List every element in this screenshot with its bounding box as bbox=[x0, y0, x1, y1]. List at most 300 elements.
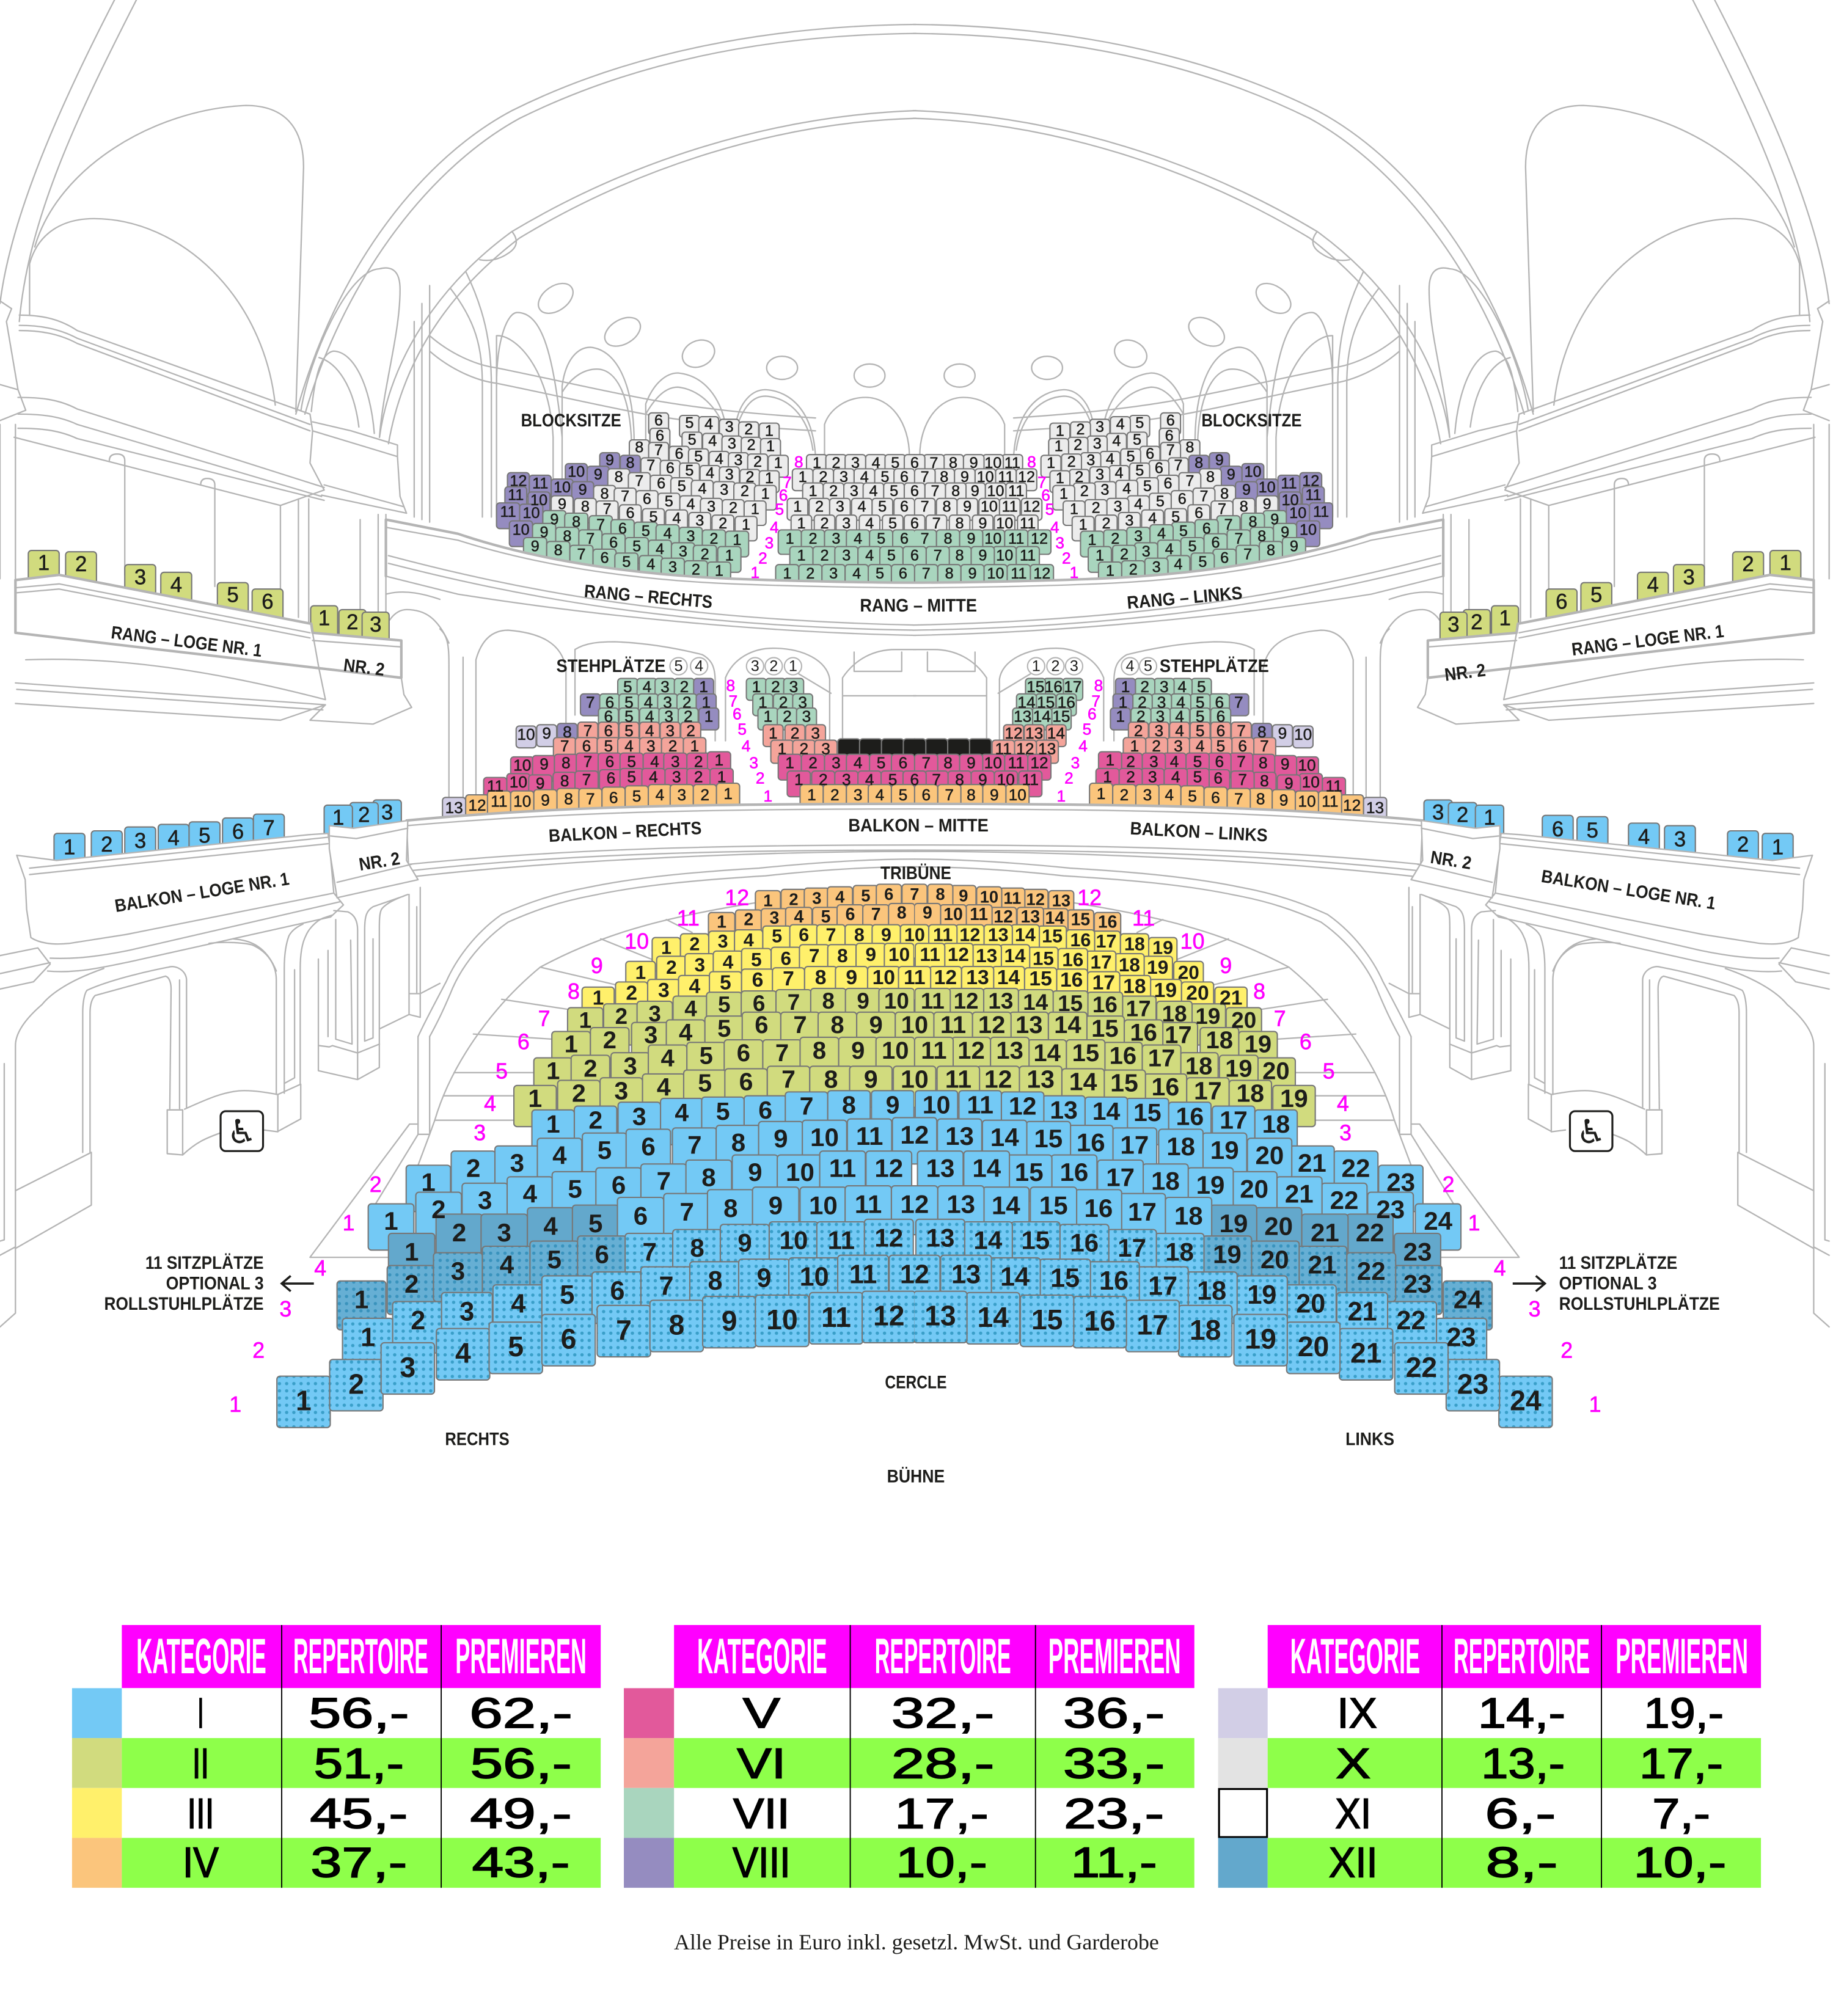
price values: 49,- bbox=[470, 1789, 572, 1837]
parkett row 10 numbers: 6 bbox=[799, 925, 809, 946]
seat numbers: Logen: 1 bbox=[332, 806, 344, 830]
parkett row 6 numbers: 14 bbox=[1054, 1012, 1081, 1039]
cercle row 2 numbers: 12 bbox=[900, 1260, 929, 1289]
rang middle numbers: 9 bbox=[970, 455, 978, 472]
rang middle numbers: 1 bbox=[799, 469, 807, 486]
seat numbers: Logen: 2 bbox=[75, 553, 87, 576]
seat numbers: Logen: 3 bbox=[1432, 802, 1444, 825]
row labels parkett and cercle left: 1 bbox=[229, 1392, 241, 1417]
balkon middle numbers: 3 bbox=[842, 770, 851, 789]
parkett row 12 numbers: 13 bbox=[1052, 891, 1070, 910]
parkett row 8 numbers: 19 bbox=[1154, 979, 1177, 1002]
rang left numbers: 1 bbox=[765, 422, 774, 439]
balkon left numbers: 6 bbox=[606, 752, 614, 770]
balkon left numbers: 4 bbox=[645, 707, 654, 726]
parkett row 7 numbers: 14 bbox=[1023, 990, 1048, 1015]
balkon left numbers: 3 bbox=[663, 693, 672, 711]
balkon middle numbers: 8 bbox=[967, 786, 976, 804]
wheelchair note left: OPTIONAL 3 bbox=[166, 1274, 264, 1294]
parkett row 6 numbers: 7 bbox=[793, 1012, 807, 1039]
rang left numbers: 8 bbox=[600, 485, 609, 502]
wheelchair note left: ROLLSTUHLPLÄTZE bbox=[104, 1294, 264, 1314]
cercle row 4 numbers: 20 bbox=[1264, 1211, 1293, 1240]
parkett row 11 numbers: 4 bbox=[794, 907, 803, 927]
parkett row 6 numbers: 18 bbox=[1206, 1027, 1233, 1054]
balkon right numbers: 1 bbox=[1130, 737, 1139, 755]
cercle row 4 numbers: 9 bbox=[769, 1191, 783, 1219]
parkett row 3 numbers: 18 bbox=[1262, 1110, 1290, 1138]
parkett row 3 numbers: 9 bbox=[886, 1090, 899, 1119]
balkon middle numbers: 12 bbox=[1016, 739, 1034, 758]
balkon left numbers: 1 bbox=[699, 677, 708, 696]
Rang seats, right half bbox=[903, 413, 1333, 589]
balkon right numbers: 3 bbox=[1155, 721, 1163, 740]
balkon middle numbers: 13 bbox=[1025, 724, 1043, 742]
balkon left numbers: 2 bbox=[686, 721, 695, 740]
rang middle numbers: 10 bbox=[987, 483, 1004, 500]
balkon left numbers: 2 bbox=[684, 707, 693, 726]
row 5 bbox=[534, 1037, 915, 1099]
balkon right numbers: 1 bbox=[1121, 677, 1130, 696]
cercle row 4 numbers: 11 bbox=[855, 1189, 882, 1218]
rang right numbers: 7 bbox=[1224, 516, 1233, 533]
balkon left numbers: 2 bbox=[682, 693, 692, 711]
balkon left numbers: 6 bbox=[606, 693, 614, 711]
rang mitte rows 8 to 4 bbox=[787, 455, 925, 537]
balkon right numbers: 9 bbox=[1284, 774, 1293, 792]
balkon left numbers: 4 bbox=[650, 752, 659, 770]
parkett row 4 numbers: 9 bbox=[864, 1065, 878, 1093]
rang mitte rows 3 to 1 bbox=[775, 530, 926, 589]
rang middle numbers: 4 bbox=[852, 565, 861, 582]
cercle row 4 numbers: 7 bbox=[679, 1197, 694, 1226]
rang middle numbers: 4 bbox=[869, 483, 877, 500]
cercle row 2 numbers: 5 bbox=[560, 1280, 574, 1310]
parkett row 3 numbers: 8 bbox=[842, 1090, 856, 1119]
row labels parkett and cercle left: 8 bbox=[568, 979, 580, 1004]
balkon right numbers: 2 bbox=[1138, 693, 1147, 711]
row labels rang and balkon: 8 bbox=[1027, 453, 1036, 471]
cercle row 3 numbers: 11 bbox=[828, 1225, 855, 1254]
balkon middle numbers: 6 bbox=[921, 786, 931, 804]
cercle row 1 numbers: 17 bbox=[1137, 1309, 1168, 1340]
cercle row 3 numbers: 24 bbox=[1454, 1285, 1482, 1313]
rang right numbers: 2 bbox=[1076, 421, 1085, 438]
rang left numbers: 1 bbox=[715, 563, 723, 580]
rang middle numbers: 7 bbox=[921, 498, 929, 515]
price values: 10,- bbox=[896, 1838, 987, 1886]
swatches bbox=[72, 1688, 122, 1888]
balkon right numbers: 8 bbox=[1256, 789, 1265, 808]
price values: IX bbox=[1337, 1689, 1377, 1737]
parkett row 10 numbers: 9 bbox=[881, 925, 891, 946]
price values: 36,- bbox=[1063, 1689, 1165, 1737]
parkett row 10 numbers: 18 bbox=[1124, 933, 1145, 954]
rang right numbers: 3 bbox=[1096, 418, 1104, 436]
parkett row 5 numbers: 18 bbox=[1185, 1053, 1212, 1079]
rang left numbers: 12 bbox=[510, 472, 527, 489]
circled digits: 5 bbox=[675, 658, 683, 675]
balkon middle numbers: 1 bbox=[778, 739, 786, 758]
parkett row 10 numbers: 8 bbox=[854, 925, 865, 946]
circled digits: 4 bbox=[695, 658, 703, 675]
parkett row 2 numbers: 21 bbox=[1298, 1149, 1326, 1177]
rang middle numbers: 4 bbox=[865, 547, 874, 564]
price values: I bbox=[197, 1689, 204, 1737]
rang right numbers: 2 bbox=[1075, 469, 1083, 486]
parkett row 1 numbers: 7 bbox=[657, 1166, 671, 1195]
cercle row 4 numbers: 18 bbox=[1174, 1201, 1203, 1230]
balkon middle numbers: 5 bbox=[899, 786, 907, 804]
parkett row 1 numbers: 6 bbox=[612, 1170, 626, 1199]
cercle row 4 numbers: 17 bbox=[1128, 1197, 1157, 1226]
balkon right numbers: 4 bbox=[1170, 752, 1179, 770]
rang right numbers: 6 bbox=[1166, 412, 1175, 429]
balkon right numbers: 12 bbox=[1343, 796, 1361, 814]
cercle row 1 numbers: 21 bbox=[1350, 1337, 1382, 1369]
cercle row 2 numbers: 11 bbox=[849, 1260, 877, 1289]
cercle row 3 numbers: 17 bbox=[1118, 1233, 1146, 1262]
rang middle numbers: 3 bbox=[842, 515, 851, 532]
seat numbers: Logen: 4 bbox=[168, 827, 180, 850]
parkett row 6 numbers: 16 bbox=[1130, 1020, 1157, 1046]
parkett row 12 numbers: 4 bbox=[835, 887, 845, 906]
rang left numbers: 4 bbox=[698, 480, 706, 497]
cercle row 3 numbers: 16 bbox=[1070, 1228, 1099, 1257]
parkett row 1 numbers: 22 bbox=[1330, 1186, 1358, 1214]
rang left numbers: 4 bbox=[664, 525, 672, 542]
rang right numbers: 3 bbox=[1113, 498, 1122, 515]
rang middle numbers: 7 bbox=[932, 515, 941, 532]
balkon right numbers: 11 bbox=[1322, 792, 1338, 811]
parkett row 6 numbers: 3 bbox=[644, 1022, 657, 1049]
row labels parkett and cercle right: 3 bbox=[1529, 1297, 1541, 1321]
cercle row 3 numbers: 5 bbox=[547, 1245, 562, 1274]
rang left numbers: 1 bbox=[725, 547, 734, 564]
balkon left numbers: 3 bbox=[677, 786, 686, 804]
price values: X bbox=[1336, 1739, 1370, 1787]
rang right numbers: 10 bbox=[1282, 492, 1299, 509]
parkett row 11 numbers: 10 bbox=[943, 905, 963, 924]
balkon left numbers: 6 bbox=[604, 707, 613, 726]
seat numbers: Logen: 4 bbox=[1638, 826, 1650, 849]
rang right numbers: 7 bbox=[1166, 442, 1175, 459]
balkon middle numbers: 12 bbox=[1030, 753, 1048, 772]
cercle row 3 numbers: 8 bbox=[690, 1233, 704, 1262]
parkett row 8 numbers: 5 bbox=[720, 971, 731, 994]
circled digits: 3 bbox=[751, 658, 759, 675]
Rang seats, left half bbox=[497, 413, 926, 589]
rang right numbers: 4 bbox=[1112, 433, 1121, 450]
pink rows bbox=[484, 752, 926, 803]
stehplaetze and row 4 to 5 seats bbox=[516, 679, 825, 748]
theatre architecture line drawing, left half bbox=[0, 0, 916, 1327]
balkon right numbers: 5 bbox=[1196, 693, 1205, 711]
balkon left numbers: 10 bbox=[510, 773, 527, 791]
cercle row 1 numbers: 11 bbox=[821, 1301, 851, 1333]
rang middle numbers: 4 bbox=[858, 498, 866, 515]
rang middle numbers: 3 bbox=[840, 469, 848, 486]
header labels: REPERTOIRE bbox=[1454, 1629, 1590, 1684]
cercle row 4 numbers: 22 bbox=[1356, 1218, 1385, 1246]
rang middle numbers: 11 bbox=[1008, 530, 1024, 547]
parkett row 4 numbers: 11 bbox=[945, 1065, 971, 1093]
balkon middle numbers: 7 bbox=[932, 770, 941, 789]
balkon middle numbers: 17 bbox=[1064, 677, 1081, 696]
rang left numbers: 6 bbox=[609, 534, 618, 551]
wheelchair note right: OPTIONAL 3 bbox=[1559, 1274, 1657, 1294]
balkon middle numbers: 4 bbox=[876, 786, 884, 804]
parkett row 5 numbers: 16 bbox=[1110, 1042, 1136, 1069]
balkon middle numbers: 11 bbox=[995, 739, 1012, 758]
cercle row 3 numbers: 19 bbox=[1213, 1240, 1242, 1268]
footer note: Alle Preise in Euro inkl. gesetzl. MwSt. und Garderobe bbox=[674, 1930, 1159, 1954]
rang middle numbers: 1 bbox=[786, 530, 794, 547]
balkon right numbers: 2 bbox=[1136, 707, 1146, 726]
row labels parkett and cercle right: 4 bbox=[1337, 1091, 1349, 1116]
rang middle numbers: 2 bbox=[820, 547, 829, 564]
row labels parkett and cercle left: 9 bbox=[591, 954, 603, 978]
cercle row 2 numbers: 21 bbox=[1347, 1297, 1377, 1326]
balkon right numbers: 7 bbox=[1237, 721, 1246, 740]
cercle row 2 numbers: 9 bbox=[757, 1264, 772, 1293]
rang left numbers: 5 bbox=[649, 508, 657, 525]
rang right numbers: 6 bbox=[1164, 475, 1173, 492]
rang right numbers: 1 bbox=[1088, 531, 1096, 549]
parkett row 2 numbers: 5 bbox=[598, 1136, 612, 1164]
cercle row 1 numbers: 24 bbox=[1510, 1385, 1542, 1417]
balkon middle numbers: 2 bbox=[791, 724, 799, 742]
row labels rang and balkon: 2 bbox=[1062, 549, 1071, 568]
rang links: RANG – LINKS bbox=[1126, 583, 1243, 613]
row labels rang and balkon: 6 bbox=[779, 486, 788, 505]
rang right numbers: 1 bbox=[1047, 455, 1055, 472]
rang left numbers: 9 bbox=[579, 481, 587, 499]
parkett row 3 numbers: 7 bbox=[800, 1092, 813, 1120]
parkett row 9 numbers: 15 bbox=[1033, 947, 1054, 969]
balkon middle numbers: 14 bbox=[1047, 724, 1065, 742]
balkon right numbers: 4 bbox=[1196, 737, 1205, 755]
balkon middle numbers: 3 bbox=[832, 753, 841, 772]
balkon right numbers: 4 bbox=[1175, 721, 1184, 740]
parkett row 8 numbers: 15 bbox=[1029, 968, 1052, 990]
rang middle numbers: 2 bbox=[809, 530, 818, 547]
row labels rang and balkon: 7 bbox=[1091, 692, 1100, 710]
parkett row 2 numbers: 8 bbox=[731, 1128, 745, 1156]
parkett row 9 numbers: 19 bbox=[1147, 956, 1168, 978]
cercle row 4 numbers: 10 bbox=[809, 1191, 838, 1219]
cercle row 1 numbers: 4 bbox=[455, 1337, 471, 1369]
column dividers bbox=[282, 1625, 441, 1888]
price values: 28,- bbox=[891, 1739, 994, 1787]
seat numbers: Logen: 4 bbox=[1647, 574, 1659, 597]
parkett row 12 numbers: 2 bbox=[789, 889, 799, 908]
row 4 bbox=[514, 1066, 936, 1127]
parkett row 6 numbers: 6 bbox=[755, 1012, 768, 1039]
rang left numbers: 1 bbox=[751, 501, 759, 518]
balkon right numbers: 2 bbox=[1134, 721, 1143, 740]
rang left numbers: 9 bbox=[558, 495, 566, 513]
rang left numbers: 10 bbox=[568, 464, 585, 481]
cercle row 3 numbers: 2 bbox=[404, 1269, 419, 1298]
balkon right numbers: 4 bbox=[1175, 707, 1184, 726]
parkett row 8 numbers: 12 bbox=[934, 966, 957, 988]
cercle row 4 numbers: 5 bbox=[588, 1209, 602, 1238]
cercle row 1 numbers: 8 bbox=[668, 1309, 684, 1340]
parkett row 10 numbers: 12 bbox=[959, 925, 980, 946]
parkett row 12 numbers: 6 bbox=[884, 885, 893, 904]
circled digits: 4 bbox=[1125, 658, 1134, 675]
balkon middle numbers: 14 bbox=[1033, 707, 1051, 726]
rang middle numbers: 11 bbox=[1020, 515, 1036, 532]
rang middle numbers: 5 bbox=[891, 455, 899, 472]
rang left numbers: 10 bbox=[554, 479, 571, 496]
balkon middle numbers: 2 bbox=[830, 786, 840, 804]
parkett row 6 numbers: 8 bbox=[830, 1012, 844, 1039]
cercle row 2 numbers: 22 bbox=[1396, 1306, 1425, 1335]
rang left numbers: 6 bbox=[618, 520, 627, 537]
balcony rails, left half bbox=[15, 520, 916, 971]
balkon left numbers: 4 bbox=[643, 677, 651, 696]
balkon left numbers: 11 bbox=[487, 776, 503, 795]
circled digits: 3 bbox=[1070, 658, 1078, 675]
rang middle numbers: 10 bbox=[984, 530, 1001, 547]
rang middle numbers: 6 bbox=[899, 565, 907, 582]
row labels parkett and cercle left: 1 bbox=[343, 1211, 354, 1235]
parkett row 6 numbers: 13 bbox=[1015, 1012, 1042, 1039]
balkon left numbers: 8 bbox=[564, 789, 573, 808]
cercle row 1 numbers: 10 bbox=[766, 1304, 798, 1335]
balkon right numbers: 6 bbox=[1217, 707, 1225, 726]
parkett row 11 numbers: 13 bbox=[1021, 907, 1040, 927]
cercle row 1 numbers: 9 bbox=[722, 1305, 737, 1337]
parkett row 9 numbers: 10 bbox=[888, 943, 910, 965]
row labels parkett and cercle right: 7 bbox=[1274, 1006, 1286, 1031]
parkett row 2 numbers: 13 bbox=[945, 1121, 974, 1150]
balkon right numbers: 13 bbox=[1366, 798, 1384, 817]
rang middle numbers: 11 bbox=[1008, 483, 1024, 500]
rang right numbers: 4 bbox=[1116, 416, 1125, 433]
parkett row 9 numbers: 11 bbox=[920, 943, 940, 965]
balkon middle numbers: 3 bbox=[854, 786, 863, 804]
parkett row 7 numbers: 8 bbox=[822, 988, 835, 1013]
row 11 bbox=[708, 904, 915, 941]
price values: 8,- bbox=[1486, 1838, 1557, 1886]
seat numbers: Logen: 1 bbox=[64, 836, 75, 859]
parkett row 10 numbers: 14 bbox=[1015, 925, 1036, 946]
balkon left numbers: 5 bbox=[624, 721, 634, 740]
balkon middle numbers: 11 bbox=[1008, 753, 1025, 772]
parkett row 8 numbers: 4 bbox=[689, 975, 700, 998]
rang left numbers: 5 bbox=[642, 522, 650, 539]
row labels parkett and cercle right: 9 bbox=[1220, 954, 1232, 978]
rang middle numbers: 4 bbox=[854, 530, 862, 547]
balkon right numbers: 5 bbox=[1217, 737, 1225, 755]
balkon left numbers: 1 bbox=[690, 737, 699, 755]
price values: VI bbox=[737, 1739, 786, 1787]
rang right numbers: 3 bbox=[1134, 528, 1143, 545]
rang left numbers: 8 bbox=[635, 439, 643, 456]
cercle row 2 numbers: 20 bbox=[1296, 1290, 1325, 1319]
price values: XII bbox=[1329, 1838, 1378, 1886]
balkon middle numbers: 1 bbox=[807, 786, 816, 804]
rang left numbers: 2 bbox=[741, 483, 749, 500]
rang middle numbers: 8 bbox=[949, 455, 957, 472]
balkon middle numbers: 14 bbox=[1017, 693, 1036, 711]
cercle row 1 numbers: 20 bbox=[1298, 1331, 1329, 1362]
balkon left numbers: 3 bbox=[672, 768, 681, 786]
parkett row 11 numbers: 8 bbox=[897, 904, 907, 923]
rang right numbers: 2 bbox=[1092, 500, 1100, 517]
parkett row 9 numbers: 5 bbox=[751, 949, 762, 971]
Parkett and Cercle seats, left half bbox=[277, 884, 940, 1428]
rang right numbers: 10 bbox=[1259, 479, 1276, 496]
parkett row 10 numbers: 1 bbox=[661, 938, 671, 959]
row labels rang and balkon: 2 bbox=[1064, 769, 1074, 787]
seat numbers: Logen: 2 bbox=[101, 833, 112, 856]
parkett row 4 numbers: 15 bbox=[1110, 1069, 1138, 1097]
parkett row 2 numbers: 9 bbox=[774, 1124, 788, 1153]
parkett row 9 numbers: 12 bbox=[948, 943, 969, 965]
parkett row 4 numbers: 1 bbox=[528, 1084, 542, 1112]
balkon right numbers: 4 bbox=[1171, 768, 1180, 786]
parkett row 8 numbers: 10 bbox=[873, 966, 895, 988]
rang right numbers: 7 bbox=[1174, 457, 1182, 474]
balkon left numbers: 3 bbox=[664, 707, 673, 726]
balkon left numbers: 2 bbox=[668, 737, 677, 755]
rang middle numbers: 9 bbox=[963, 498, 971, 515]
balkon middle numbers: 13 bbox=[1014, 707, 1031, 726]
rang right numbers: 8 bbox=[1185, 439, 1194, 456]
seat numbers: Logen: 1 bbox=[38, 552, 49, 575]
rang left numbers: 5 bbox=[665, 493, 673, 510]
rang middle numbers: 2 bbox=[832, 455, 840, 472]
seat numbers: Logen: 1 bbox=[318, 607, 330, 630]
parkett row 10 numbers: 19 bbox=[1152, 938, 1173, 959]
balkon right numbers: 3 bbox=[1148, 768, 1157, 786]
cercle row 3 numbers: 21 bbox=[1308, 1250, 1337, 1279]
balkon middle numbers: 2 bbox=[819, 770, 828, 789]
rang middle numbers: 8 bbox=[956, 515, 964, 532]
rang middle numbers: 6 bbox=[900, 498, 909, 515]
cercle row 1 numbers: 5 bbox=[508, 1331, 524, 1362]
balkon right numbers: 5 bbox=[1197, 677, 1206, 696]
rang left numbers: 8 bbox=[572, 514, 580, 531]
rang left numbers: 2 bbox=[747, 436, 755, 453]
balkon left numbers: 7 bbox=[586, 789, 595, 808]
row labels parkett and cercle left: 10 bbox=[624, 929, 649, 954]
balkon middle numbers: 8 bbox=[955, 770, 964, 789]
cercle row 2 numbers: 15 bbox=[1050, 1264, 1080, 1293]
row labels parkett and cercle right: 2 bbox=[1443, 1172, 1454, 1197]
rang right numbers: 12 bbox=[1302, 472, 1319, 489]
parkett row 8 numbers: 2 bbox=[626, 982, 637, 1004]
balkon right numbers: 4 bbox=[1176, 693, 1185, 711]
parkett row 5 numbers: 7 bbox=[775, 1040, 789, 1067]
parkett row 4 numbers: 18 bbox=[1236, 1079, 1264, 1107]
parkett row 1 numbers: 2 bbox=[431, 1194, 446, 1223]
balkon left numbers: 8 bbox=[560, 772, 569, 790]
rang right numbers: 7 bbox=[1243, 546, 1252, 563]
row 7 bbox=[568, 988, 914, 1049]
balkon left numbers: 4 bbox=[656, 786, 664, 804]
rang right numbers: 1 bbox=[1055, 438, 1063, 455]
row labels rang and balkon: 5 bbox=[775, 500, 784, 519]
balkon loge nr 2 seats right bbox=[1424, 800, 1504, 836]
balkon right numbers: 11 bbox=[1326, 776, 1342, 795]
rang left numbers: 3 bbox=[707, 498, 715, 515]
rang middle numbers: 2 bbox=[815, 498, 824, 515]
